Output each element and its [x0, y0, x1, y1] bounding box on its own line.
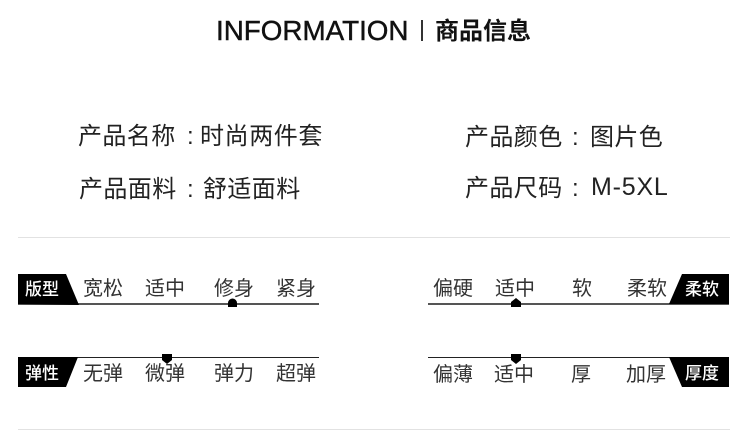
- fit marker: [228, 298, 237, 307]
- fit options: 适中: [145, 277, 185, 300]
- elasticity options: 超弹: [276, 362, 316, 385]
- elasticity options: 微弹: [145, 362, 185, 385]
- fit options: 紧身: [276, 277, 316, 300]
- scale: softness: [428, 274, 729, 307]
- elasticity options: [83, 362, 316, 385]
- softness options: 偏硬: [433, 277, 473, 300]
- product color: :: [572, 124, 579, 151]
- elasticity tag: 弹性: [25, 364, 59, 383]
- title: 商品信息: [435, 18, 531, 45]
- softness options: 适中: [495, 277, 535, 300]
- fit options: 宽松: [83, 277, 123, 300]
- product fabric: [79, 176, 301, 203]
- fit tag: [18, 274, 79, 305]
- product name: 时尚两件套: [200, 123, 323, 150]
- elasticity marker: [162, 354, 172, 364]
- elasticity options: 无弹: [83, 362, 123, 385]
- scale: elasticity: [18, 354, 319, 387]
- product fabric: :: [187, 176, 194, 203]
- fit tag: 版型: [25, 280, 59, 299]
- product size: M-5XL: [591, 173, 669, 201]
- softness options: 软: [572, 277, 592, 300]
- product name: 产品名称: [78, 123, 176, 150]
- softness options: 柔软: [627, 277, 667, 300]
- fit options: [83, 277, 316, 300]
- product size: :: [572, 175, 579, 202]
- scale: thickness: [428, 354, 729, 387]
- product fabric: 产品面料: [79, 176, 177, 203]
- softness tag: 柔软: [685, 280, 719, 299]
- product size: 产品尺码: [465, 175, 563, 202]
- product color: [465, 124, 663, 151]
- thickness options: 加厚: [626, 363, 666, 386]
- softness marker: [511, 298, 521, 307]
- product size: [465, 173, 669, 202]
- product color: 产品颜色: [465, 124, 563, 151]
- thickness options: [433, 363, 666, 386]
- fit options: 修身: [214, 277, 254, 300]
- product fabric: 舒适面料: [203, 176, 301, 203]
- elasticity tag: [18, 357, 78, 387]
- softness options: [433, 277, 667, 300]
- thickness tag: 厚度: [685, 364, 719, 383]
- thickness options: 适中: [494, 363, 534, 386]
- thickness tag: [669, 357, 729, 387]
- softness tag: [669, 274, 729, 304]
- title: INFORMATION: [216, 15, 409, 46]
- product name: :: [187, 123, 194, 150]
- title: [216, 15, 531, 46]
- product color: 图片色: [590, 124, 663, 151]
- thickness options: 厚: [571, 364, 591, 386]
- thickness marker: [511, 354, 521, 364]
- thickness options: 偏薄: [433, 363, 473, 386]
- elasticity options: 弹力: [214, 362, 254, 385]
- product name: [78, 123, 323, 150]
- scale: fit: [18, 274, 319, 307]
